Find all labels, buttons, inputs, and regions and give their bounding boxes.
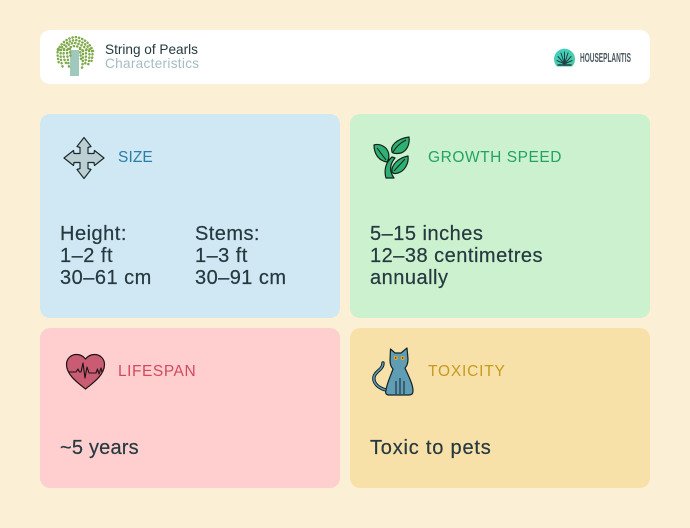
text: lifespan value: ~5 years	[60, 437, 139, 459]
text: stems: Stems:	[195, 223, 260, 245]
panel: lifespan	[40, 328, 340, 488]
icon: string of pearls plant	[56, 36, 94, 76]
header bar	[40, 30, 650, 84]
logo text: HOUSEPLANTIS	[580, 50, 631, 65]
text: height: 1–2 ft	[60, 245, 113, 267]
icon: four-way arrows	[63, 136, 105, 180]
icon: heart with pulse	[66, 354, 106, 390]
text: growth values: 12–38 centimetres	[370, 245, 543, 267]
text: height	[60, 223, 152, 289]
text: growth values: annually	[370, 267, 449, 289]
icon: logo mark	[554, 48, 575, 66]
heading: toxicity: TOXICITY	[428, 363, 506, 380]
heading: growth speed: GROWTH SPEED	[428, 149, 562, 166]
heading: lifespan: LIFESPAN	[118, 363, 196, 380]
subheading: Characteristics	[105, 56, 199, 71]
heading: size: SIZE	[118, 149, 153, 166]
text: toxicity value: Toxic to pets	[370, 437, 492, 459]
text: height: Height:	[60, 223, 127, 245]
icon: cat	[372, 347, 414, 396]
text: growth values: 5–15 inches	[370, 223, 483, 245]
panel: toxicity	[350, 328, 650, 488]
logo: houseplantis	[554, 48, 631, 66]
title	[105, 42, 199, 71]
text: stems	[195, 223, 286, 289]
icon: leaves	[373, 136, 410, 179]
text: growth values	[370, 223, 543, 289]
text: stems: 30–91 cm	[195, 267, 286, 289]
heading: String of Pearls	[105, 42, 198, 57]
panel: growth speed	[350, 114, 650, 318]
text: height: 30–61 cm	[60, 267, 152, 289]
text: stems: 1–3 ft	[195, 245, 248, 267]
panel: size	[40, 114, 340, 318]
